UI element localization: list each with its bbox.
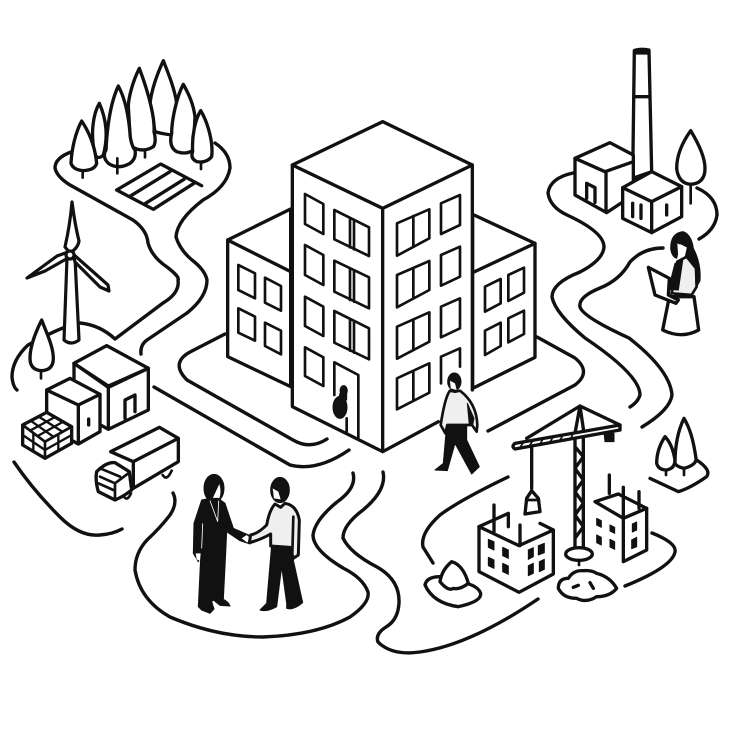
right wing (473, 214, 535, 388)
figure in doorway (333, 386, 347, 432)
logistics yard (23, 320, 178, 500)
right factory hall (623, 172, 682, 233)
crane hook and load (525, 448, 540, 514)
small depot (47, 378, 100, 444)
two trees on island (650, 418, 708, 492)
delivery truck (96, 427, 178, 500)
right unfinished building (595, 475, 647, 562)
chimney (633, 48, 652, 178)
central building complex (228, 122, 535, 452)
factory (575, 48, 705, 233)
construction site (425, 406, 708, 607)
right face double windows (397, 209, 429, 409)
walking person (435, 373, 479, 474)
forest with field (71, 61, 212, 209)
dirt mound (558, 571, 617, 600)
left face windows (305, 194, 323, 386)
warehouse (74, 346, 148, 429)
people shaking hands (193, 474, 303, 613)
woman with clipboard (648, 232, 700, 335)
tree row (71, 61, 212, 178)
left face double windows (334, 210, 369, 359)
entrance door (334, 362, 358, 438)
left unfinished building (479, 505, 553, 592)
rock on island (425, 562, 481, 607)
left wing (228, 209, 291, 387)
pallet of boxes (23, 412, 72, 458)
tree (677, 131, 705, 203)
main tower (292, 122, 472, 452)
person in sweater (249, 477, 303, 611)
field (117, 164, 202, 209)
crane base (566, 548, 592, 560)
right face windows (441, 195, 460, 383)
left factory hall (575, 143, 633, 213)
tree (30, 320, 53, 378)
tower crane (513, 406, 620, 565)
person in suit (193, 474, 254, 613)
winding roads (12, 143, 717, 653)
wind turbine (27, 202, 109, 343)
